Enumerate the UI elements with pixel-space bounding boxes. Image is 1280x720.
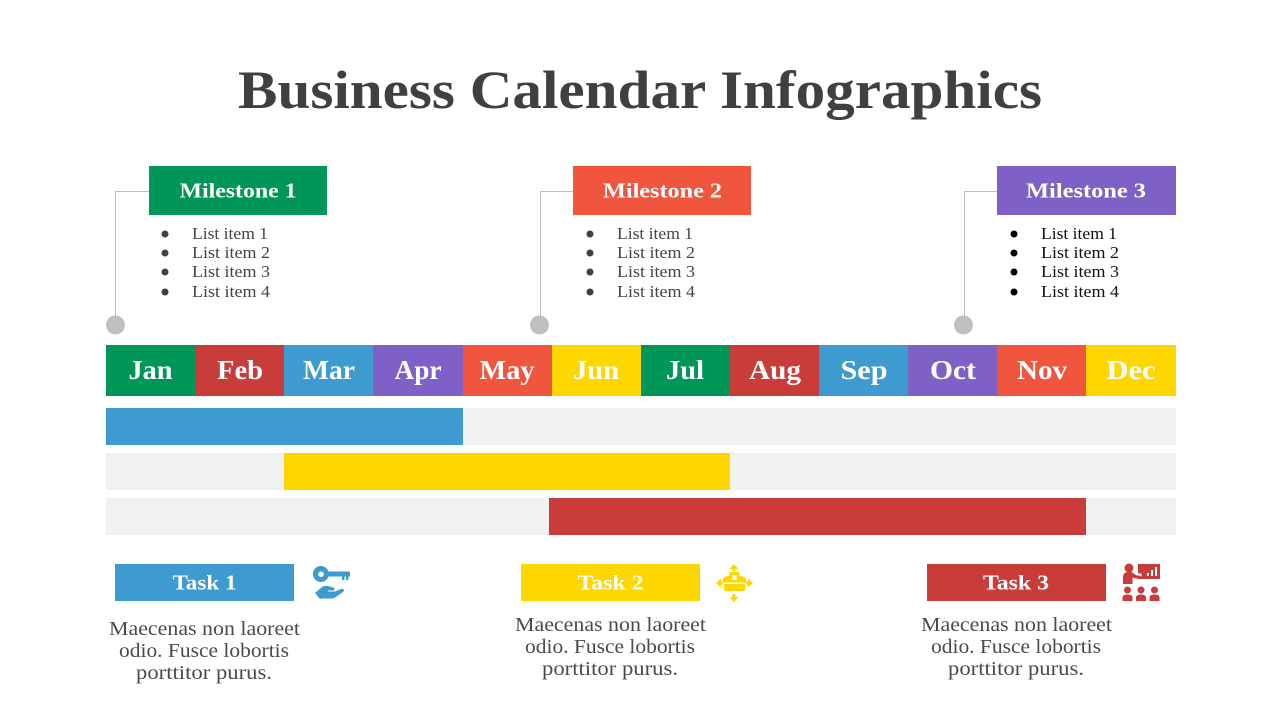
heading: milestone 1 [149,166,327,215]
heading: milestone 2 [573,166,751,215]
panel: milestone 1 [106,166,327,334]
month strip: Aug [749,355,802,385]
marker: milestone 3 [954,316,973,334]
list: milestone 2: List item 1 [617,224,693,243]
icon: presenter with audience [1122,564,1160,601]
list: milestone 2 [586,224,696,301]
list: milestone 2: List item 3 [617,262,695,281]
month strip: Jan [128,355,172,385]
panel: task 2 [515,564,753,680]
heading: task 3: Task 3 [983,570,1049,594]
gantt row: task 1 [106,408,1176,445]
heading: milestone 2: Milestone 2 [603,178,722,202]
heading: task 3 [927,564,1106,601]
list: milestone 1: List item 2 [192,243,270,262]
heading: milestone 3: Milestone 3 [1026,178,1146,202]
list: milestone 3: List item 1 [1041,224,1117,243]
month strip: Sep [840,355,888,385]
month strip: Dec [1106,355,1156,385]
text: task 1 [109,618,300,684]
list: milestone 1: List item 3 [192,262,270,281]
month strip: Nov [1017,355,1068,385]
text: task 3: odio. Fusce lobortis [931,636,1101,658]
marker: milestone 1 [106,316,125,334]
panel: milestone 2 [530,166,751,334]
month strip: Jun [573,355,619,385]
list: milestone 1: List item 1 [192,224,268,243]
month strip [106,345,1176,396]
list: milestone 1 [162,224,271,301]
month strip: Oct [930,355,976,385]
panel: task 3 [921,564,1160,680]
panel: milestone 3 [954,166,1176,334]
list: milestone 3 [1010,224,1120,301]
marker: milestone 2 [530,316,549,334]
text: task 1: odio. Fusce lobortis [119,640,289,662]
icon: briefcase with arrows [716,564,753,602]
text: task 3: Maecenas non laoreet [921,614,1112,636]
text: task 1: Maecenas non laoreet [109,618,300,640]
heading: milestone 1: Milestone 1 [180,178,296,202]
list: milestone 3: List item 4 [1041,282,1120,301]
heading: task 2: Task 2 [578,570,644,594]
text: task 2: Maecenas non laoreet [515,614,706,636]
gantt row: task 3 [106,498,1176,535]
heading: task 1: Task 1 [172,570,236,594]
text: task 2 [515,614,706,680]
connector: milestone 1 [116,192,149,320]
connector: milestone 3 [964,192,997,320]
month strip: May [480,355,535,385]
list: milestone 2: List item 4 [617,282,696,301]
panel: task 1 [109,564,350,684]
text: task 1: porttitor purus. [136,662,272,684]
month strip: Feb [217,355,263,385]
list: milestone 3: List item 3 [1041,262,1119,281]
gantt chart [106,408,1176,535]
list: milestone 1: List item 4 [192,282,271,301]
text: task 2: porttitor purus. [542,658,678,680]
list: milestone 2: List item 2 [617,243,695,262]
list: milestone 3: List item 2 [1041,243,1119,262]
month strip: Mar [303,355,355,385]
heading: task 1 [115,564,294,601]
month strip: Jul [666,355,705,385]
text: task 2: odio. Fusce lobortis [525,636,695,658]
connector: milestone 2 [540,192,573,320]
heading: task 2 [521,564,700,601]
icon: key and hand [313,566,350,599]
title: Business Calendar Infographics [238,60,1042,120]
text: task 3 [921,614,1112,680]
gantt row: task 2 [106,453,1176,490]
month strip: Apr [394,355,442,385]
heading: milestone 3 [997,166,1176,215]
text: task 3: porttitor purus. [948,658,1084,680]
